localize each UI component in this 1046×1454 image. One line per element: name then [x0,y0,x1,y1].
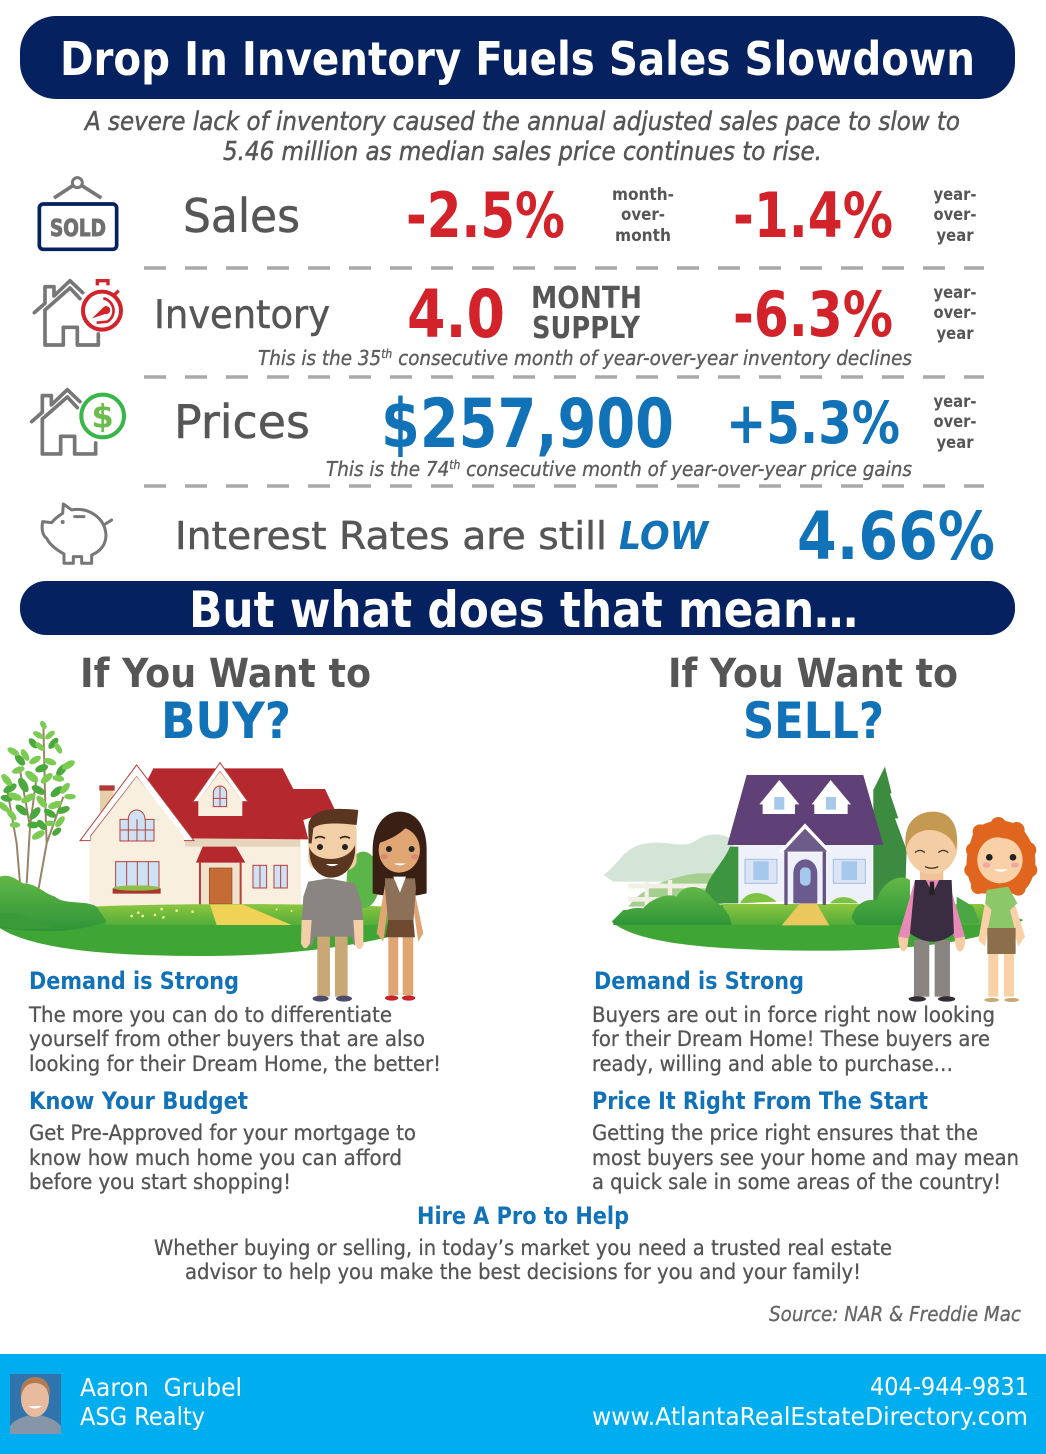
sales row: month [615,226,671,246]
interest rates row: Interest Rates are still [175,514,607,558]
inventory row: over- [934,303,976,323]
buy column text [28,967,441,1194]
icon: sold sign [39,178,117,249]
house [705,775,883,905]
buy column text: Demand is Strong [29,967,239,995]
interest rates row: 4.66% [797,498,995,575]
sell column text: Getting the price right ensures that the [592,1121,978,1145]
icon: house with dollar [32,390,124,454]
icon: sold sign: SOLD [50,216,106,242]
sales row: -1.4% [733,179,893,252]
inventory row: 4.0 [407,276,505,353]
sales row: year- [934,185,976,205]
woman [373,812,427,1001]
sales row: over- [934,205,976,225]
inventory row [154,276,976,370]
inventory row: SUPPLY [532,311,641,346]
sell column text: ready, willing and able to purchase… [592,1052,953,1076]
agent name: Aaron Grubel [80,1373,242,1402]
hire a pro text [154,1202,892,1284]
heading: sell: SELL? [743,692,884,750]
icon: piggy bank [42,504,112,563]
bushes [613,877,980,925]
inventory row: consecutive month of year-over-year inventory declines [392,346,912,370]
prices row: over- [934,412,976,432]
inventory row: -6.3% [733,278,893,351]
ground [0,907,390,956]
interest rates row [175,498,995,575]
sell column text: a quick sale in some areas of the country! [592,1170,1001,1194]
agent name: ASG Realty [80,1402,205,1431]
source: Source: NAR & Freddie Mac [769,1302,1021,1326]
house body [80,763,335,907]
sales row: year [936,226,974,246]
buy column text: know how much home you can afford [29,1146,402,1170]
heading: sell: If You Want to [668,651,958,697]
inventory row: year [936,324,974,344]
buy column text: Know Your Budget [29,1087,248,1115]
prices row: year- [934,392,976,412]
prices row: th [449,458,460,472]
hire a pro text: advisor to help you make the best decisions for you and your family! [185,1260,861,1284]
man [898,812,965,1002]
ground [612,905,1023,951]
agent photo [10,1374,61,1434]
tree [873,767,907,900]
contact details: www.AtlantaRealEstateDirectory.com [592,1402,1028,1431]
sell column text: Buyers are out in force right now looking [592,1003,995,1027]
sell column text: most buyers see your home and may mean [592,1146,1019,1170]
sales row: over- [621,205,665,225]
buy column text: looking for their Dream Home, the better! [29,1052,441,1076]
footer [0,1354,1046,1454]
inventory row: Inventory [154,293,330,338]
heading: buy: BUY? [161,692,291,750]
icon: house with stopwatch [34,281,121,345]
tree [0,720,76,890]
sell column text: for their Dream Home! These buyers are [592,1027,990,1051]
subtitle: A severe lack of inventory caused the annual adjusted sales pace to slow to [83,107,960,137]
prices row [174,385,976,481]
title banner [20,16,1015,99]
prices row: This is the 74 [326,457,464,481]
subtitle: 5.46 million as median sales price continues to rise. [223,137,822,167]
prices row: consecutive month of year-over-year price gains [460,457,912,481]
inventory row: year- [934,283,976,303]
sell column text: Price It Right From The Start [592,1087,928,1115]
hire a pro text: Whether buying or selling, in today’s market you need a trusted real estate [154,1236,892,1260]
sales row: Sales [183,189,300,243]
contact details [592,1372,1029,1431]
sell column text: Demand is Strong [594,967,804,995]
heading: sell [668,651,958,750]
man [301,809,363,1002]
buy column text: Get Pre-Approved for your mortgage to [29,1121,416,1145]
inventory row: th [381,347,392,361]
illustration: sellers scene [603,767,1037,1002]
heading: buy: If You Want to [80,651,371,697]
sell column text [592,967,1019,1194]
woman [964,817,1037,1002]
prices row: +5.3% [726,389,900,457]
lawn and bushes [0,852,390,931]
sales row: month- [612,185,674,205]
prices row: year [936,433,974,453]
hire a pro text: Hire A Pro to Help [417,1202,629,1230]
section banner: But what does that mean… [189,581,858,639]
agent name [80,1373,242,1431]
subtitle [83,107,960,167]
buy column text: before you start shopping! [29,1170,291,1194]
interest rates row: LOW [619,514,710,558]
icon: house with dollar: $ [92,397,114,435]
buy column text: yourself from other buyers that are also [29,1027,425,1051]
prices row: Prices [174,395,310,449]
sales row [183,179,976,252]
prices row: $257,900 [381,385,674,464]
hills and fence [603,834,905,907]
buy column text: The more you can do to differentiate [28,1003,392,1027]
heading: buy [80,651,371,750]
illustration: buyers scene [0,720,427,1002]
inventory row: MONTH [531,281,642,316]
sales row: -2.5% [406,179,565,252]
contact details: 404-944-9831 [870,1372,1029,1401]
inventory row: This is the 35 [258,346,396,370]
